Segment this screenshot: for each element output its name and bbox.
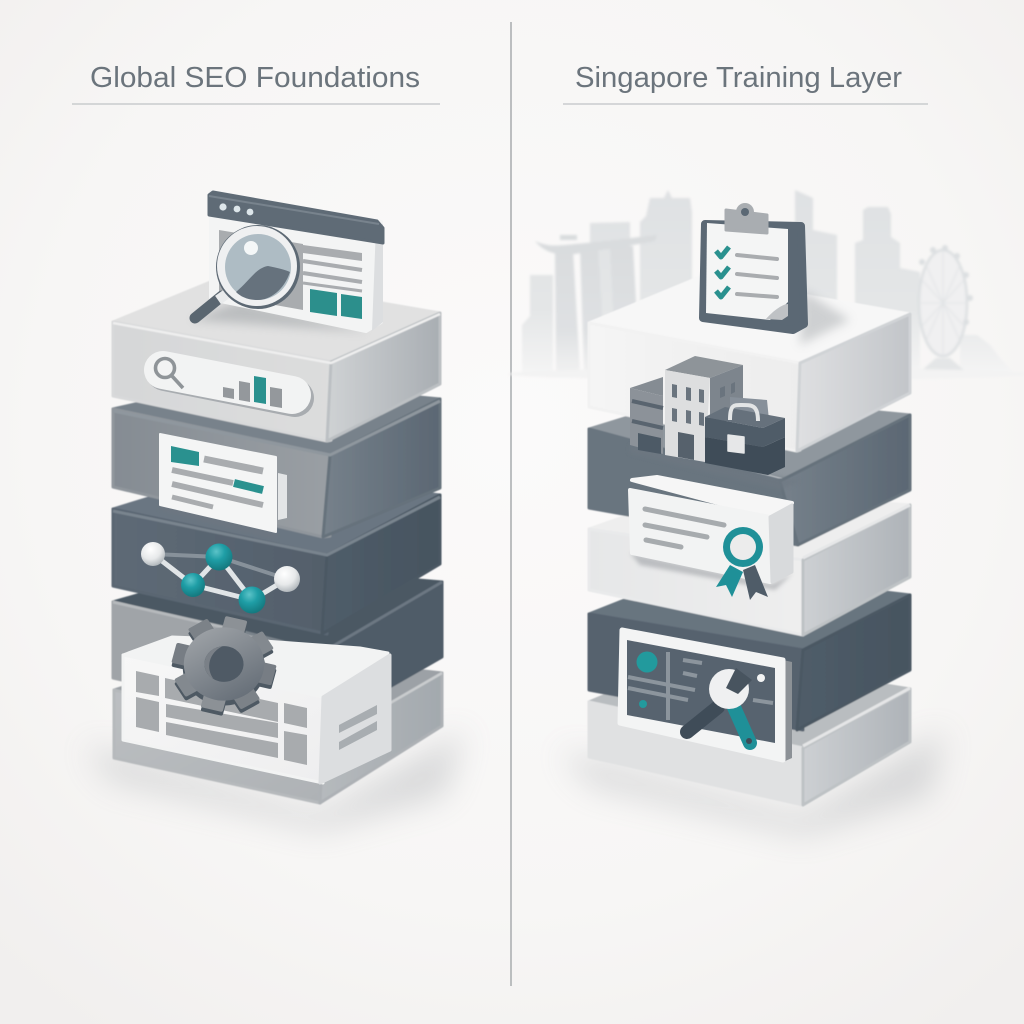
briefcase (705, 397, 785, 475)
slab 3: dark network layer (113, 470, 440, 634)
icon: link network (141, 542, 300, 614)
icon: certificate with ribbon (630, 477, 793, 600)
left stack (113, 276, 442, 803)
Singapore Flyer wheel (919, 245, 973, 372)
icon: content document (160, 434, 287, 540)
slab 2: dark gray buildings layer (589, 395, 910, 545)
slab 4: dark panel layer (589, 570, 910, 730)
browser window (209, 192, 383, 331)
icon: browser window with magnifier (190, 192, 383, 332)
wrench (687, 668, 752, 744)
icon: gear (161, 607, 287, 725)
clipboard clip (726, 203, 767, 233)
icon: keyboard-like block (123, 637, 390, 783)
right ground shadow (560, 730, 945, 835)
slab 3: light certificate layer (589, 490, 910, 635)
slab 1: light search layer (113, 276, 440, 441)
ribbon seal (716, 527, 768, 600)
icon: search bar with bars (156, 358, 295, 408)
low building (630, 377, 663, 454)
slab 1: white clipboard layer (589, 277, 910, 451)
slab 5: base (114, 650, 442, 803)
slab 2: gray document layer (113, 380, 440, 537)
title: Singapore Training Layer: Singapore Training Layer (575, 62, 902, 94)
tall building (665, 356, 743, 462)
icon: office buildings and briefcase (630, 356, 800, 490)
center divider line (510, 22, 512, 986)
left ground shadow (85, 730, 465, 830)
right stack (589, 277, 910, 805)
magnifying glass (195, 225, 300, 318)
clipboard board (703, 224, 804, 330)
Singapore skyline silhouette (508, 190, 1024, 380)
checklist (716, 247, 729, 297)
icon: dashboard with wrench (620, 630, 792, 762)
slab 5: base (589, 655, 910, 805)
icon: clipboard with checklist (703, 203, 850, 345)
slab 4: gray left with dark right (113, 565, 442, 725)
title: Global SEO Foundations: Global SEO Foundations (90, 62, 420, 94)
Marina Bay Sands (535, 235, 657, 372)
